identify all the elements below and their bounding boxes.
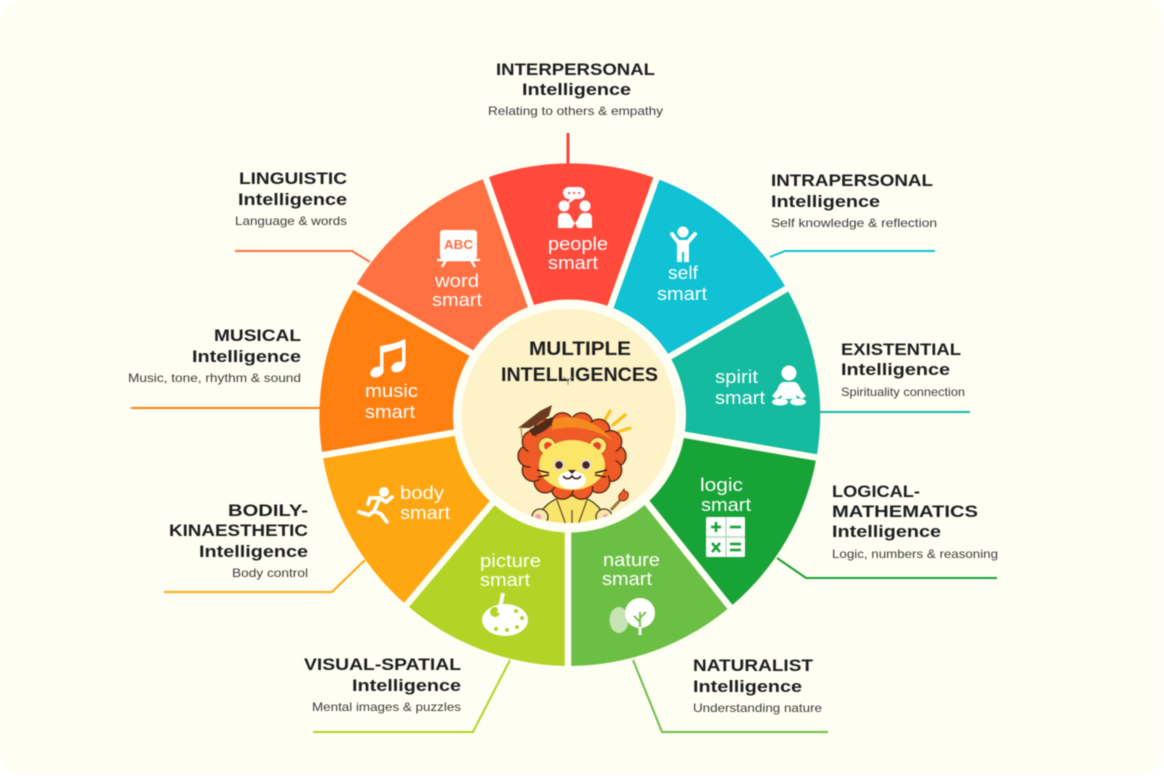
label: musical: Music, tone, rhythm & sound [128,371,301,385]
label: intrapersonal: INTRAPERSONAL [771,171,933,190]
hub title: INTELLIGENCES [501,365,658,386]
center hub [453,300,686,532]
label: naturalist: NATURALIST [693,656,814,675]
label: existential: Spirituality connection [841,385,965,399]
hub title [501,339,658,386]
segment label: music smart: smart [365,402,415,422]
tail [611,497,623,510]
segment label: spirit smart: smart [715,388,765,408]
segment label: picture smart: picture [480,551,541,571]
label: interpersonal: Intelligence [522,80,631,99]
segment label: word smart: word [434,271,479,291]
segment label: music smart [365,339,418,422]
label: bodily-kinaesthetic: Body control [232,566,308,580]
label: naturalist: Intelligence [693,677,802,696]
label: logical-mathematics: MATHEMATICS [832,502,978,521]
label: musical: Intelligence [192,347,301,366]
label: visual-spatial: Mental images & puzzles [312,700,461,714]
segment: body smart [322,416,569,605]
label: visual-spatial [304,655,461,714]
label: bodily-kinaesthetic: Intelligence [199,542,308,561]
label: bodily-kinaesthetic: KINAESTHETIC [169,521,308,540]
segment label: logic smart: logic [700,475,743,495]
label: musical [128,326,301,385]
label: visual-spatial: VISUAL-SPATIAL [304,655,461,674]
segment label: body smart: body [400,483,444,503]
icon: paint palette [482,593,528,636]
segment label: nature smart: smart [602,569,652,589]
label: visual-spatial: Intelligence [352,676,461,695]
label: linguistic: Intelligence [238,190,347,209]
label: interpersonal: INTERPERSONAL [496,60,655,79]
label: bodily-kinaesthetic [169,501,308,580]
connector lines [131,133,997,732]
icon: musical note [369,339,406,379]
icon: meditating person [772,366,806,406]
body [542,494,602,524]
segment label: spirit smart: spirit [715,367,758,387]
label: musical: MUSICAL [214,326,301,345]
segment: nature smart [568,416,730,666]
segment: word smart [355,178,569,416]
label: intrapersonal: Intelligence [771,192,880,211]
segment: self smart [569,178,786,416]
sparkle rays [605,411,630,432]
segment label: self smart [657,226,707,304]
mane [518,413,626,499]
hub title: MULTIPLE [529,339,631,360]
label: naturalist [693,656,822,715]
segment label: picture smart [480,551,541,636]
segment label: self smart: self [668,263,699,283]
label: linguistic [235,169,347,228]
wheel of nine segments [312,163,828,677]
icon: two people talking [558,187,592,228]
segment label: word smart: smart [432,290,482,310]
lion mascot [518,405,630,530]
segment label: people smart: smart [548,253,598,273]
label: existential: Intelligence [841,360,950,379]
label: naturalist: Understanding nature [693,701,822,715]
segment label: logic smart [700,475,751,557]
icon: running figure [359,487,392,522]
label: logical-mathematics: LOGICAL- [832,482,920,501]
segment label: self smart: smart [657,284,707,304]
segment label: music smart: music [365,381,418,401]
label: logical-mathematics: Intelligence [832,522,941,541]
ears [538,438,556,454]
label: intrapersonal [771,171,937,230]
label: linguistic: Language & words [235,214,347,228]
label: existential [841,340,965,399]
icon: ABC board: ABC [444,237,474,252]
segment label: people smart: people [548,234,608,254]
segment label: nature smart [602,550,660,635]
segment: logic smart [569,416,816,607]
segment label: nature smart: nature [603,550,660,570]
label: bodily-kinaesthetic: BODILY- [228,501,308,520]
segment label: body smart [359,483,450,523]
label: interpersonal: Relating to others & empathy [488,104,663,118]
segment: spirit smart [569,288,820,458]
segment: picture smart [406,416,569,666]
label: interpersonal [488,60,663,118]
label: logical-mathematics [832,482,998,561]
face [539,440,605,490]
segment label: logic smart: smart [701,495,751,515]
graduation cap [518,405,552,428]
label: logical-mathematics: Logic, numbers & reasoning [832,547,998,561]
segment label: spirit smart [715,366,806,408]
label: existential: EXISTENTIAL [841,340,961,359]
icon: person arms raised [672,226,695,262]
icon: trees [610,598,655,635]
label: intrapersonal: Self knowledge & reflection [771,216,937,230]
segment: music smart [319,287,569,455]
segment label: people smart [548,187,608,273]
segment label: word smart [432,230,482,310]
segment: people smart [486,163,656,416]
segment label: body smart: smart [400,503,450,523]
icon: maths symbols grid [706,517,745,557]
segment label: picture smart: smart [480,570,530,590]
label: linguistic: LINGUISTIC [239,169,347,188]
